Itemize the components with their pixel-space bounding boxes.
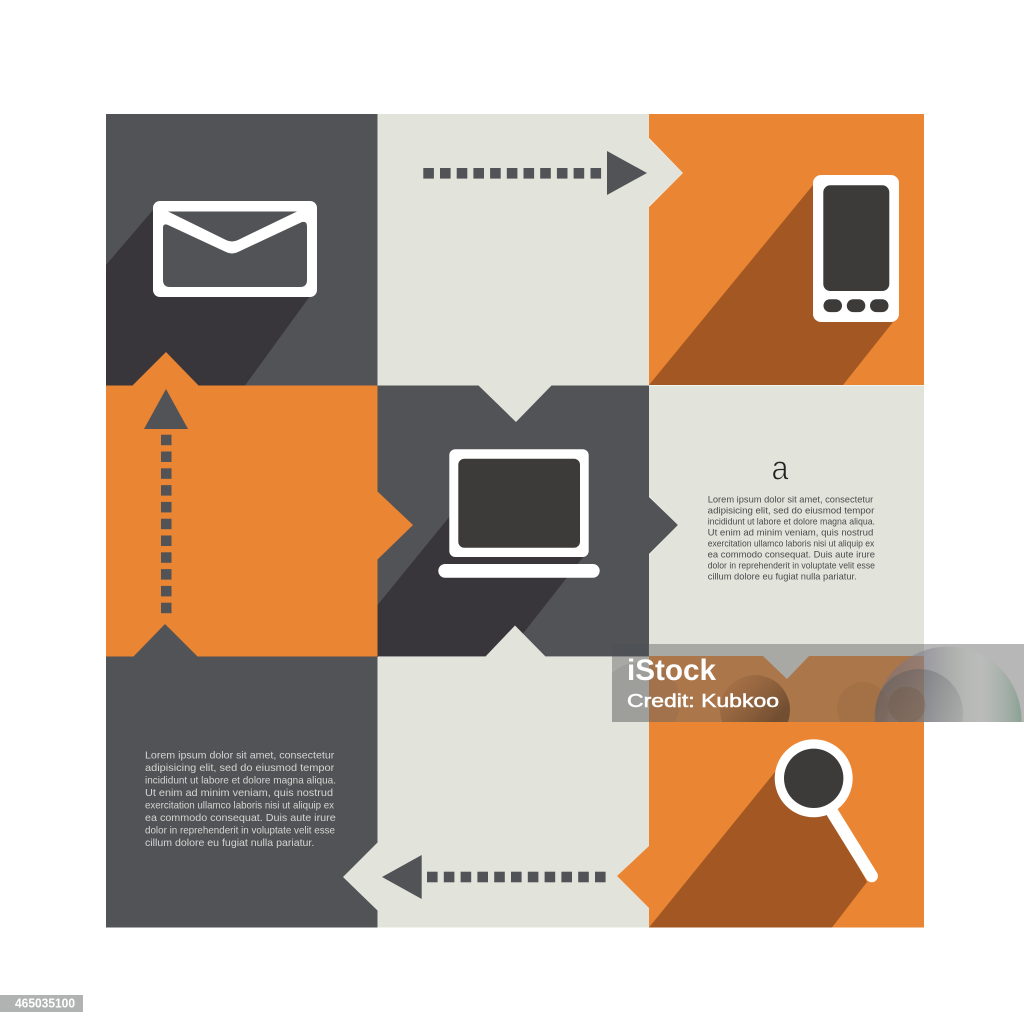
- text block: right: incididunt ut labore et dolore magna aliqua.: [708, 516, 875, 526]
- text block: right: [708, 494, 875, 581]
- text block: left: [145, 749, 336, 849]
- email tip pointing right: [377, 137, 412, 208]
- phone long shadow: [649, 185, 893, 385]
- panel: left orange: [106, 352, 378, 656]
- text block: right: cillum dolore eu fugiat nulla pariatur.: [708, 571, 857, 581]
- top connector tip: [648, 138, 683, 207]
- text block: left: Lorem ipsum dolor sit amet, consectetur: [145, 749, 335, 761]
- watermark credit: Credit: Kubkoo: [627, 690, 779, 711]
- laptop long shadow: [378, 516, 584, 656]
- panel: bottom connector: [343, 657, 649, 928]
- text block: left: cillum dolore eu fugiat nulla pariatur.: [145, 837, 314, 849]
- icon: magnifier: [775, 739, 872, 876]
- orange tip up: [132, 352, 199, 386]
- arrow: bottom dashed left: [382, 855, 606, 899]
- arrow: top dashed right: [423, 151, 647, 195]
- text block: left: incididunt ut labore et dolore magna aliqua.: [145, 774, 336, 786]
- dark tip up: [133, 624, 198, 657]
- image id tag: [0, 995, 83, 1012]
- panel: phone: [649, 114, 924, 385]
- bottom connector tip left: [343, 842, 378, 911]
- orange tip right: [377, 491, 413, 560]
- panel: top connector: [378, 114, 683, 386]
- text block: left: dolor in reprehenderit in voluptate velit esse: [145, 824, 335, 836]
- email long shadow: [106, 210, 310, 386]
- text block: right: ea commodo consequat. Duis aute irure: [708, 549, 875, 559]
- panel: right text: [649, 386, 924, 679]
- watermark logo: iStock: [627, 654, 716, 687]
- text block: right: Lorem ipsum dolor sit amet, consectetur: [708, 494, 873, 504]
- panel: bottom left dark: [106, 624, 378, 928]
- text block: left: Ut enim ad minim veniam, quis nostrud: [145, 787, 333, 799]
- text block: right: adipisicing elit, sed do eiusmod tempor: [708, 505, 874, 515]
- icon: phone: [813, 175, 899, 322]
- text tip down: [763, 656, 809, 679]
- arrow: left dashed up: [144, 389, 188, 613]
- panel: laptop: [377, 385, 678, 657]
- text block: left: exercitation ullamco laboris nisi ut aliquip ex: [145, 799, 335, 811]
- heading letter: a: [772, 450, 789, 488]
- icon: envelope: [153, 201, 317, 297]
- bottom notch: [485, 626, 546, 657]
- watermark band: [612, 644, 1024, 722]
- image id tag: 465035100: [15, 996, 75, 1010]
- laptop tip right: [648, 496, 678, 555]
- panel: search: [617, 656, 924, 928]
- text block: right: Ut enim ad minim veniam, quis nostrud: [708, 527, 873, 537]
- icon: laptop: [438, 449, 600, 578]
- text block: right: dolor in reprehenderit in voluptate velit esse: [708, 560, 875, 570]
- text block: left: adipisicing elit, sed do eiusmod tempor: [145, 762, 335, 774]
- text block: left: ea commodo consequat. Duis aute irure: [145, 812, 336, 824]
- top notch: [478, 385, 552, 422]
- search long shadow: [649, 772, 867, 928]
- panel: email: [106, 114, 412, 386]
- text block: right: exercitation ullamco laboris nisi ut aliquip ex: [708, 538, 875, 548]
